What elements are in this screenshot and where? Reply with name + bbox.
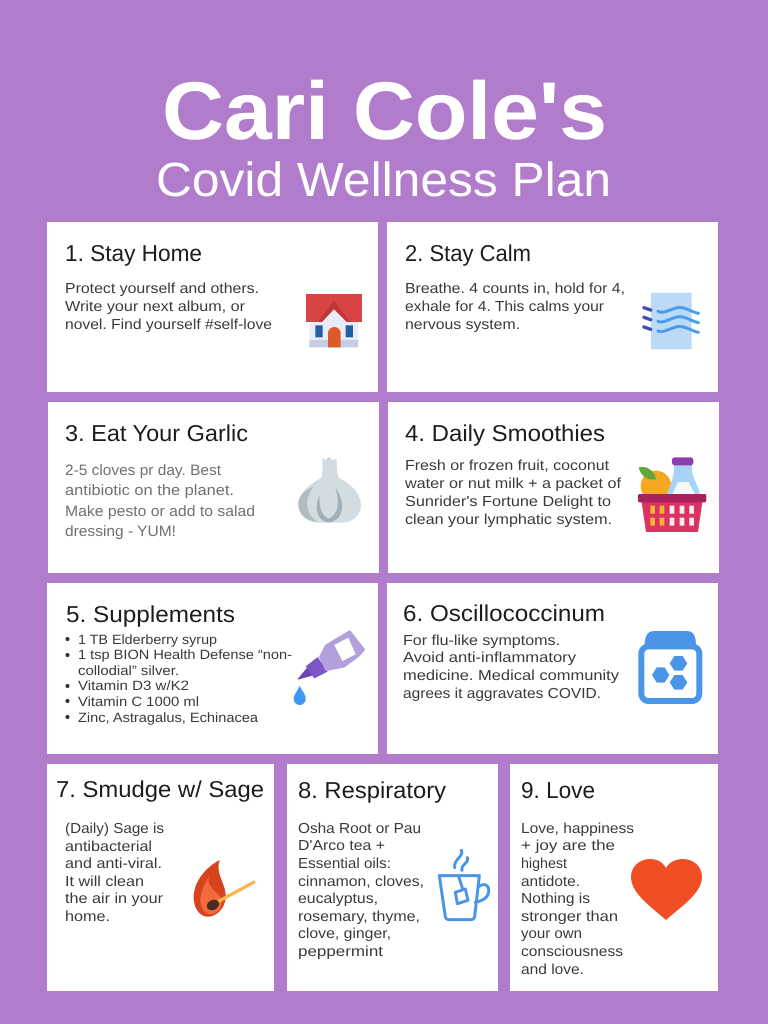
text: Eat Your Garlic body: antibiotic on the planet.: [65, 482, 234, 499]
panel: 9. Love: [510, 764, 718, 991]
heading: Stay Calm: 2. Stay Calm: [405, 240, 531, 266]
text: Love body: consciousness: [521, 944, 623, 960]
text: Oscillococcinum body: For flu-like symptoms.: [403, 633, 560, 649]
text: Daily Smoothies body: water or nut milk + a packet of: [404, 476, 622, 492]
icon: garlic: [298, 457, 361, 523]
text: Love body: and love.: [521, 962, 584, 978]
text: Stay Calm body: exhale for 4. This calms your: [405, 299, 604, 315]
icon: house: [306, 294, 362, 347]
text: Daily Smoothies body: clean your lymphatic system.: [405, 512, 612, 528]
text: Smudge body: It will clean: [65, 874, 144, 890]
icon: dropper bottle: [294, 632, 364, 705]
text: Smudge body: and anti-viral.: [65, 856, 162, 872]
text: Smudge body: [65, 821, 164, 925]
text: supplements list: Vitamin C 1000 ml: [78, 694, 199, 709]
text: Eat Your Garlic body: 2-5 cloves pr day. Best: [65, 462, 222, 479]
panel: 5. Supplements: [47, 583, 378, 754]
text: Smudge body: the air in your: [65, 891, 163, 907]
panel: 8. Respiratory: [287, 764, 498, 991]
text: Respiratory body: Osha Root or Pau: [298, 821, 421, 837]
icon: heart: [631, 859, 702, 920]
text: Love body: [521, 821, 634, 978]
text: Love body: Love, happiness: [521, 821, 634, 837]
text: Respiratory body: cinnamon, cloves,: [298, 874, 424, 890]
panel: 6. Oscillococcinum: [387, 583, 718, 754]
text: Respiratory body: peppermint: [298, 944, 383, 960]
panel: 2. Stay Calm: [387, 222, 718, 392]
title: Cari Cole's: [162, 66, 607, 157]
text: supplements list: Vitamin D3 w/K2: [78, 678, 189, 693]
icon: lit match: [194, 860, 254, 917]
text: Stay Calm body: [405, 281, 625, 333]
text: Oscillococcinum body: Avoid anti-inflammatory: [403, 650, 577, 666]
icon: tea cup: [439, 850, 489, 920]
text: Daily Smoothies body: [404, 458, 622, 528]
text: supplements list: collodial” silver.: [78, 663, 179, 678]
icon: breathing air: [644, 293, 698, 349]
text: Respiratory body: rosemary, thyme,: [298, 909, 420, 925]
text: supplements list: 1 tsp BION Health Defense “non-: [78, 647, 292, 662]
text: Love body: antidote.: [521, 874, 580, 890]
text: Smudge body: antibacterial: [65, 839, 152, 855]
heading: Supplements: 5. Supplements: [66, 601, 235, 627]
text: supplements list: 1 TB Elderberry syrup: [78, 632, 217, 647]
panel: 7. Smudge w/ Sage: [47, 764, 274, 991]
text: Stay Home body: novel. Find yourself #self-love: [65, 317, 272, 333]
text: Oscillococcinum body: [403, 633, 620, 702]
icon: medicine jar: [641, 631, 699, 701]
heading: Stay Home: 1. Stay Home: [65, 240, 202, 266]
text: Eat Your Garlic body: [65, 462, 255, 540]
text: Stay Calm body: Breathe. 4 counts in, hold for 4,: [405, 281, 625, 297]
text: Respiratory body: D'Arco tea +: [298, 838, 385, 854]
panel: 4. Daily Smoothies: [388, 402, 719, 573]
heading: Love: 9. Love: [521, 777, 595, 803]
title: Covid Wellness Plan: [156, 154, 611, 207]
heading: Smudge w/ Sage: 7. Smudge w/ Sage: [56, 776, 264, 802]
text: Eat Your Garlic body: dressing - YUM!: [65, 523, 176, 540]
text: Love body: your own: [521, 926, 582, 942]
text: Love body: stronger than: [521, 909, 618, 925]
title: [156, 66, 611, 207]
text: Eat Your Garlic body: Make pesto or add to salad: [65, 503, 255, 520]
heading: Daily Smoothies: 4. Daily Smoothies: [405, 420, 605, 446]
text: Respiratory body: eucalyptus,: [298, 891, 378, 907]
text: Love body: highest: [521, 856, 567, 872]
text: Love body: + joy are the: [521, 838, 615, 854]
text: Stay Calm body: nervous system.: [405, 317, 520, 333]
text: Smudge body: (Daily) Sage is: [65, 821, 164, 837]
text: Respiratory body: clove, ginger,: [298, 926, 391, 942]
text: Love body: Nothing is: [521, 891, 590, 907]
text: Respiratory body: Essential oils:: [298, 856, 391, 872]
text: Stay Home body: [65, 281, 272, 333]
heading: Respiratory: 8. Respiratory: [298, 777, 447, 803]
heading: Oscillococcinum: 6. Oscillococcinum: [403, 600, 605, 626]
text: Stay Home body: Protect yourself and others.: [65, 281, 259, 297]
panel: 1. Stay Home: [47, 222, 378, 392]
text: Stay Home body: Write your next album, or: [65, 299, 245, 315]
text: supplements list: [66, 632, 292, 725]
text: supplements list: Zinc, Astragalus, Echinacea: [78, 710, 259, 725]
text: Oscillococcinum body: medicine. Medical community: [403, 668, 620, 684]
panel: 3. Eat Your Garlic: [48, 402, 379, 573]
text: Daily Smoothies body: Fresh or frozen fruit, coconut: [405, 458, 609, 474]
text: Smudge body: home.: [65, 909, 110, 925]
text: Respiratory body: [298, 821, 424, 960]
heading: Eat Your Garlic: 3. Eat Your Garlic: [65, 420, 248, 446]
text: Oscillococcinum body: agrees it aggravates COVID.: [403, 686, 601, 702]
icon: basket with orange and bottle: [638, 457, 706, 532]
text: Daily Smoothies body: Sunrider's Fortune Delight to: [405, 494, 611, 510]
